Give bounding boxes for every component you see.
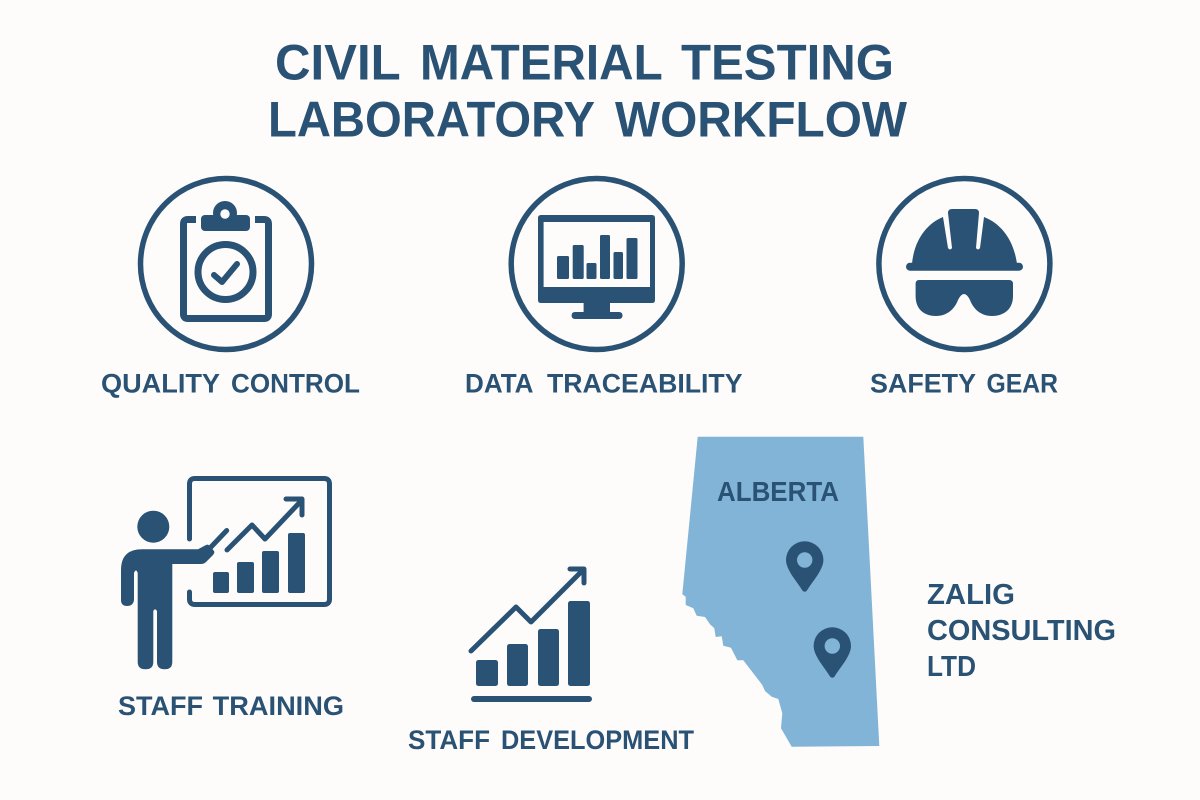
title: MATERIAL xyxy=(420,34,663,90)
icon: rising bar chart with arrow xyxy=(471,569,592,702)
icon: monitor with bar chart in circle xyxy=(511,178,682,350)
label: staff training: STAFF xyxy=(118,691,203,721)
label: staff training: TRAINING xyxy=(213,691,344,721)
icon: clipboard with check mark in circle xyxy=(140,178,312,350)
panel: alberta map xyxy=(682,437,879,747)
label: staff development: DEVELOPMENT xyxy=(501,725,694,755)
title: LABORATORY xyxy=(268,92,595,148)
panel: quality control xyxy=(101,178,360,399)
panel: staff training xyxy=(118,478,344,721)
icon: presenter pointing at growth chart xyxy=(121,478,330,669)
title: WORKFLOW xyxy=(615,92,908,148)
label: alberta: ALBERTA xyxy=(717,476,839,507)
panel: staff development xyxy=(408,569,694,755)
label: data traceability: DATA xyxy=(465,369,534,399)
label: quality control xyxy=(101,369,360,399)
company name xyxy=(927,579,1116,683)
icon: map pin north xyxy=(786,541,823,592)
label: data traceability: TRACEABILITY xyxy=(547,369,742,399)
panel: data traceability xyxy=(465,178,742,399)
label: quality control: QUALITY xyxy=(101,369,220,399)
company name: CONSULTING xyxy=(927,615,1116,647)
map: alberta province shape xyxy=(682,437,879,747)
company name: LTD xyxy=(927,651,976,683)
label: staff development: STAFF xyxy=(408,725,490,755)
label: safety gear: GEAR xyxy=(986,369,1058,399)
company name: ZALIG xyxy=(927,579,1015,611)
title: CIVIL xyxy=(275,34,401,90)
icon: hard hat and goggles in circle xyxy=(879,178,1050,350)
panel: safety gear xyxy=(870,178,1058,399)
title: TESTING xyxy=(681,34,894,90)
label: safety gear xyxy=(870,369,1058,399)
label: safety gear: SAFETY xyxy=(870,369,976,399)
label: quality control: CONTROL xyxy=(231,369,360,399)
label: staff training xyxy=(118,691,344,721)
icon: map pin south xyxy=(814,627,851,678)
title xyxy=(268,34,908,148)
label: data traceability xyxy=(465,369,742,399)
label: staff development xyxy=(408,725,694,755)
